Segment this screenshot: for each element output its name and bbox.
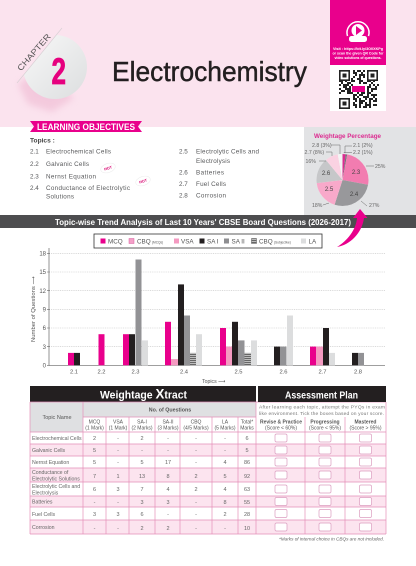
topics list: 2.1 bbox=[30, 148, 39, 156]
table values: - bbox=[167, 448, 169, 454]
table values: - bbox=[94, 526, 96, 532]
table values: 5 bbox=[93, 448, 96, 454]
table values: - bbox=[224, 436, 226, 442]
topic names: Fuel Cells bbox=[32, 512, 55, 518]
table values: 2 bbox=[93, 436, 96, 442]
HOT badge 2.4 bbox=[134, 174, 152, 188]
x axis labels bbox=[70, 370, 362, 376]
table values: - bbox=[195, 500, 197, 506]
topics list: Fuel Cells bbox=[196, 181, 226, 188]
HOT badge 2.3 bbox=[99, 161, 117, 175]
table values: - bbox=[167, 512, 169, 518]
pie labels bbox=[304, 143, 386, 209]
y axis labels: 9 bbox=[43, 308, 47, 314]
legend: CBQ bbox=[259, 238, 273, 246]
table values: 13 bbox=[139, 474, 145, 480]
legend: (MCQs) bbox=[152, 240, 163, 244]
chapter label: CHAPTER bbox=[15, 32, 53, 73]
bars 2.5 bbox=[220, 322, 257, 365]
table values: 86 bbox=[244, 460, 250, 466]
legend bbox=[94, 234, 322, 248]
topics list: Electrochemical Cells bbox=[46, 148, 111, 156]
table values: 7 bbox=[140, 487, 144, 493]
table values: - bbox=[224, 526, 226, 532]
table values: 2 bbox=[140, 526, 144, 532]
table: weightage xtract bbox=[30, 386, 386, 534]
topic names bbox=[32, 436, 82, 531]
topic names: Electrolytic Solutions bbox=[32, 476, 80, 482]
table values: - bbox=[224, 448, 226, 454]
topics list: 2.4 bbox=[30, 185, 39, 192]
panel: weightage percentage bbox=[304, 127, 416, 215]
table values: 5 bbox=[140, 460, 144, 466]
table values: 55 bbox=[244, 500, 250, 506]
topics list: 2.8 bbox=[179, 192, 188, 200]
header band bbox=[0, 0, 416, 127]
title: Electrochemistry bbox=[112, 56, 307, 87]
table values: 17 bbox=[165, 460, 171, 466]
y axis labels: 12 bbox=[39, 289, 47, 295]
bars 2.7 bbox=[310, 328, 335, 365]
pie labels: 2.1 (2%) bbox=[353, 143, 373, 149]
bars 2.6 bbox=[274, 316, 293, 365]
topic names: Electrochemical Cells bbox=[32, 436, 82, 442]
legend: VSA bbox=[181, 238, 194, 246]
table values: 5 bbox=[223, 474, 227, 480]
topics list: 2.3 bbox=[30, 174, 39, 180]
topics list: 2.2 bbox=[30, 161, 39, 168]
icon: video play bbox=[347, 22, 369, 42]
table values: - bbox=[117, 460, 119, 466]
topic names: Corrosion bbox=[32, 525, 55, 531]
footnote: *Marks of internal choice in CBQs are not included. bbox=[279, 536, 384, 542]
heading: weightage xtract: Weightage Xtract bbox=[100, 386, 187, 402]
topic names: Conductance of bbox=[32, 470, 69, 476]
assessment column headers: (Score < 60%) bbox=[265, 426, 297, 432]
pie labels: 2.7 (8%) bbox=[304, 150, 324, 156]
x axis labels: 2.2 bbox=[97, 370, 106, 376]
table values: 2 bbox=[194, 474, 198, 480]
table values: - bbox=[195, 436, 197, 442]
table header cells: Marks bbox=[240, 426, 254, 432]
pie labels: 2.2 (1%) bbox=[353, 150, 373, 156]
pie labels: 27% bbox=[369, 203, 380, 209]
topics list: Topics : bbox=[30, 138, 55, 144]
topics list: 2.6 bbox=[179, 170, 188, 176]
table values: - bbox=[117, 526, 119, 532]
pie labels: 16% bbox=[306, 159, 316, 165]
table values: 1 bbox=[116, 474, 120, 480]
table values: 63 bbox=[244, 487, 250, 493]
table values: 7 bbox=[93, 474, 96, 480]
y axis title: Number of Questions ⟶ bbox=[31, 276, 37, 342]
table values: 92 bbox=[244, 474, 250, 480]
topics list: Nernst Equation bbox=[46, 174, 96, 180]
legend: SA I bbox=[207, 238, 219, 246]
legend: CBQ bbox=[137, 238, 151, 246]
assessment instructions: like environment. Tick the boxes based on your score. bbox=[259, 411, 384, 417]
table header cells: (1 Mark) bbox=[85, 426, 104, 432]
topics list: 2.5 bbox=[179, 148, 188, 156]
table values: 28 bbox=[244, 512, 250, 518]
heading: weightage: Weightage Percentage bbox=[314, 133, 381, 140]
bars 2.4 bbox=[165, 284, 202, 365]
table header cells: LA bbox=[222, 420, 229, 426]
QR instruction text: video solutions of questions. bbox=[334, 56, 382, 60]
score checkboxes bbox=[275, 434, 372, 531]
heading: weightage xtract bbox=[30, 386, 256, 402]
table values: 8 bbox=[166, 474, 170, 480]
pie chart: 2.3 bbox=[352, 170, 361, 176]
topics list bbox=[30, 138, 259, 200]
table values: 5 bbox=[93, 460, 96, 466]
x axis title: Topics ⟶ bbox=[202, 379, 226, 385]
assessment instructions: After learning each topic, attempt the PYQs in exam bbox=[259, 404, 385, 410]
table values: 3 bbox=[116, 487, 120, 493]
table header cells: VSA bbox=[113, 420, 124, 426]
pie chart bbox=[316, 154, 368, 206]
assessment column headers: Mastered bbox=[355, 420, 376, 426]
table values: - bbox=[195, 526, 197, 532]
assessment column headers: (Score > 95%) bbox=[349, 426, 382, 432]
trend analysis bar: Topic-wise Trend Analysis of Last 10 Years' CBSE Board Questions (2026-2017) bbox=[55, 218, 351, 227]
table header cells: (1 Mark) bbox=[109, 426, 128, 432]
x axis labels: 2.5 bbox=[234, 370, 243, 376]
x axis labels: 2.7 bbox=[318, 370, 327, 376]
topics list: Solutions bbox=[46, 194, 74, 200]
table header cells: No. of Questions bbox=[149, 408, 191, 414]
table values: 10 bbox=[244, 526, 250, 532]
table values: - bbox=[117, 448, 119, 454]
bars 2.1 bbox=[68, 353, 80, 365]
table values: 4 bbox=[223, 460, 227, 466]
HOT badge 2.4: HOT bbox=[139, 178, 148, 185]
table values: 8 bbox=[223, 500, 227, 506]
table header cells: (3 Marks) bbox=[157, 426, 179, 432]
arrow: to pie chart bbox=[337, 209, 368, 247]
table values: - bbox=[117, 436, 119, 442]
heading: assessment plan: Assessment Plan bbox=[285, 390, 358, 402]
pie chart: 2.4 bbox=[350, 192, 359, 198]
table header cells: SA-I bbox=[137, 420, 147, 426]
chapter number: 2 bbox=[52, 51, 66, 92]
QR instruction text: Visit : https://bit.ly/3O0XKPg bbox=[333, 47, 383, 51]
table header cells: SA-II bbox=[162, 420, 174, 426]
table values bbox=[93, 436, 250, 532]
HOT badge 2.3: HOT bbox=[104, 165, 113, 172]
table values: 6 bbox=[245, 436, 249, 442]
y axis labels: 3 bbox=[43, 345, 47, 351]
table values: 2 bbox=[223, 512, 227, 518]
table values: - bbox=[195, 448, 197, 454]
topics list: 2.7 bbox=[179, 181, 188, 188]
panel: assessment plan bbox=[258, 386, 386, 531]
table header cells: MCQ bbox=[89, 420, 100, 426]
table header cells: CBQ bbox=[191, 420, 202, 426]
topic names: Galvanic Cells bbox=[32, 448, 66, 454]
table header cells: Total* bbox=[241, 420, 253, 426]
y axis labels: 6 bbox=[43, 326, 47, 332]
y axis labels bbox=[39, 252, 47, 370]
table values: 2 bbox=[166, 526, 170, 532]
table header cells: (5 Marks) bbox=[214, 426, 236, 432]
heading: assessment plan bbox=[258, 386, 386, 402]
table values: - bbox=[195, 460, 197, 466]
table header cells bbox=[30, 402, 256, 432]
legend: LA bbox=[308, 238, 317, 246]
table values: 3 bbox=[116, 512, 120, 518]
table values: - bbox=[141, 448, 143, 454]
chapter badge bbox=[15, 28, 87, 112]
bars 2.2 bbox=[98, 334, 104, 365]
pie labels: 2.8 (3%) bbox=[312, 143, 332, 149]
y axis labels: 15 bbox=[39, 270, 47, 276]
x axis labels: 2.4 bbox=[180, 370, 189, 376]
QR instruction text: or scan the given QR Code for bbox=[332, 52, 384, 56]
bars 2.8 bbox=[352, 353, 364, 365]
table values: 6 bbox=[93, 487, 96, 493]
topic names: Electrolysis bbox=[32, 490, 59, 496]
table values: 3 bbox=[166, 500, 170, 506]
topics list: Electrolytic Cells and bbox=[196, 148, 259, 156]
assessment column headers: Progressing bbox=[310, 420, 340, 426]
legend: (Subjective) bbox=[274, 240, 291, 244]
pie chart: 2.6 bbox=[322, 171, 331, 177]
table values: - bbox=[167, 436, 169, 442]
table values: 2 bbox=[194, 487, 198, 493]
topics list: Electrolysis bbox=[196, 158, 230, 165]
table values: 5 bbox=[245, 448, 249, 454]
pie chart: 2.5 bbox=[325, 187, 334, 193]
QR panel bbox=[330, 0, 386, 111]
pie labels: 18% bbox=[312, 203, 323, 209]
topics list: Corrosion bbox=[196, 192, 226, 200]
table header cells: (4/5 Marks) bbox=[183, 426, 209, 432]
QR instruction text bbox=[332, 47, 384, 60]
assessment column headers bbox=[260, 420, 382, 432]
x axis labels: 2.6 bbox=[279, 370, 288, 376]
table values: - bbox=[117, 500, 119, 506]
table values: - bbox=[195, 512, 197, 518]
topic names: Batteries bbox=[32, 500, 53, 506]
topic names: Electrolytic Cells and bbox=[32, 484, 80, 490]
QR code bbox=[339, 71, 379, 108]
trend analysis bar bbox=[0, 215, 416, 228]
x axis labels: 2.8 bbox=[354, 370, 362, 376]
assessment instructions bbox=[259, 404, 385, 417]
legend: MCQ bbox=[108, 238, 123, 246]
bars 2.3 bbox=[123, 260, 148, 365]
x axis labels: 2.1 bbox=[70, 370, 78, 376]
assessment column headers: (Score < 95%) bbox=[309, 426, 341, 432]
table values: 4 bbox=[166, 487, 170, 493]
x axis labels: 2.3 bbox=[131, 370, 140, 376]
table header cells: Topic Name bbox=[42, 415, 72, 421]
pie labels: 25% bbox=[375, 164, 386, 170]
topic names: Nernst Equation bbox=[32, 460, 69, 466]
topics list: Batteries bbox=[196, 170, 224, 176]
table header cells: (2 Marks) bbox=[131, 426, 153, 432]
table values: 6 bbox=[140, 512, 144, 518]
legend: SA II bbox=[232, 238, 245, 246]
table values: 2 bbox=[140, 436, 144, 442]
table values: 4 bbox=[223, 487, 227, 493]
y axis labels: 18 bbox=[39, 252, 47, 258]
table values: 3 bbox=[93, 512, 96, 518]
bar chart bbox=[31, 248, 385, 385]
y axis labels: 0 bbox=[43, 364, 47, 370]
table values: - bbox=[94, 500, 96, 506]
topics list: Galvanic Cells bbox=[46, 161, 89, 168]
topics list: Conductance of Electrolytic bbox=[46, 185, 130, 192]
assessment column headers: Revise & Practice bbox=[260, 420, 302, 426]
table values: 3 bbox=[140, 500, 144, 506]
table row stripes bbox=[30, 444, 386, 534]
learning objectives banner: LEARNING OBJECTIVES bbox=[37, 122, 135, 132]
